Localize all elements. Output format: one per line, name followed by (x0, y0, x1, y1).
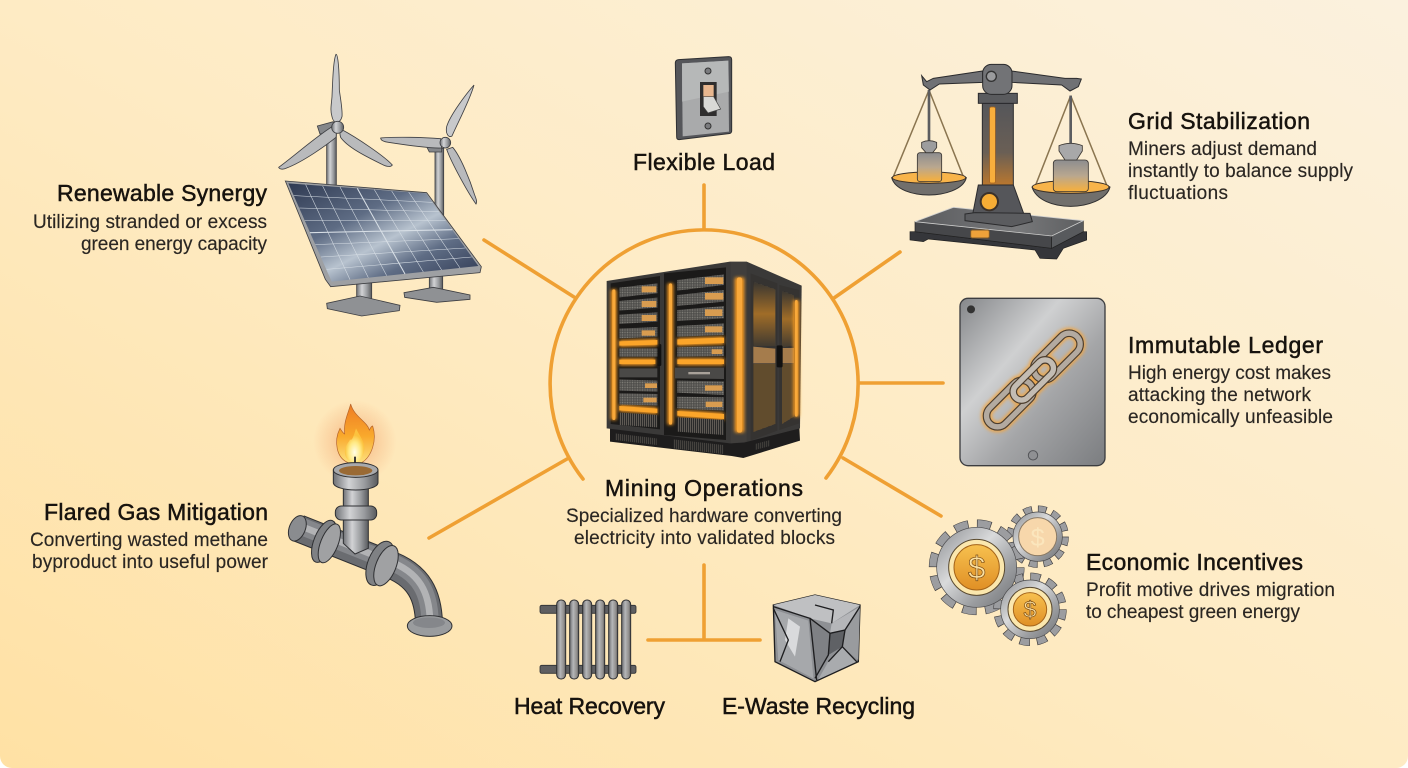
description: grid stabilization (1128, 139, 1354, 204)
description: immutable ledger: attacking the network (1128, 385, 1312, 406)
description: immutable ledger: High energy cost makes (1128, 363, 1331, 384)
panel: heat recovery (514, 600, 666, 719)
icon: gears with coins: $ (1024, 597, 1037, 623)
description: grid stabilization: Miners adjust demand (1128, 139, 1317, 160)
heading: grid stabilization: Grid Stabilization (1128, 108, 1310, 134)
description: mining operations: Specialized hardware converting (566, 506, 842, 527)
panel: e-waste recycling (722, 595, 915, 719)
icon: chain on steel plate (960, 298, 1105, 466)
heading: flared gas mitigation: Flared Gas Mitigation (44, 499, 268, 525)
heading: heat recovery: Heat Recovery (514, 693, 666, 719)
icon: server rack (607, 262, 802, 458)
description: grid stabilization: fluctuations (1128, 183, 1228, 204)
icon: balance scale (892, 64, 1110, 259)
icon: radiator (540, 600, 636, 679)
icon: wind turbines and solar panel (279, 54, 481, 316)
panel: immutable ledger (960, 298, 1333, 466)
description: renewable synergy: Utilizing stranded or excess (33, 212, 267, 233)
description: flared gas mitigation: Converting wasted methane (30, 530, 268, 551)
description: flared gas mitigation: byproduct into useful power (32, 552, 269, 573)
heading: economic incentives: Economic Incentives (1086, 549, 1303, 575)
heading: e-waste recycling: E-Waste Recycling (722, 693, 915, 719)
icon: gears with coins: $ (968, 551, 985, 586)
icon: gears with coins: $ (1031, 524, 1045, 552)
description: immutable ledger (1128, 363, 1333, 428)
heading: immutable ledger: Immutable Ledger (1128, 332, 1323, 358)
panel: grid stabilization (892, 64, 1354, 259)
panel: renewable synergy (33, 54, 481, 316)
heading: renewable synergy: Renewable Synergy (57, 180, 268, 206)
description: grid stabilization: instantly to balance supply (1128, 161, 1354, 182)
description: immutable ledger: economically unfeasible (1128, 407, 1333, 428)
icon: wall switch (675, 57, 732, 140)
icon: crushed metal cube (773, 595, 860, 682)
panel: economic incentives (934, 510, 1335, 641)
panel: mining operations (566, 262, 842, 549)
description: mining operations (566, 506, 842, 549)
description: economic incentives (1086, 580, 1335, 623)
description: renewable synergy (33, 212, 268, 255)
description: renewable synergy: green energy capacity (81, 234, 268, 255)
description: economic incentives: Profit motive drives migration (1086, 580, 1335, 601)
description: mining operations: electricity into validated blocks (574, 528, 835, 549)
description: economic incentives: to cheapest green energy (1086, 602, 1300, 623)
panel: flared gas mitigation (30, 400, 452, 636)
description: flared gas mitigation (30, 530, 269, 573)
icon: flare pipe (285, 400, 452, 636)
panel: flexible load (633, 57, 775, 175)
heading: flexible load: Flexible Load (633, 149, 775, 175)
icon: gears with coins (934, 510, 1064, 641)
hub ring and connector lines (429, 185, 943, 640)
heading: mining operations: Mining Operations (605, 475, 803, 501)
